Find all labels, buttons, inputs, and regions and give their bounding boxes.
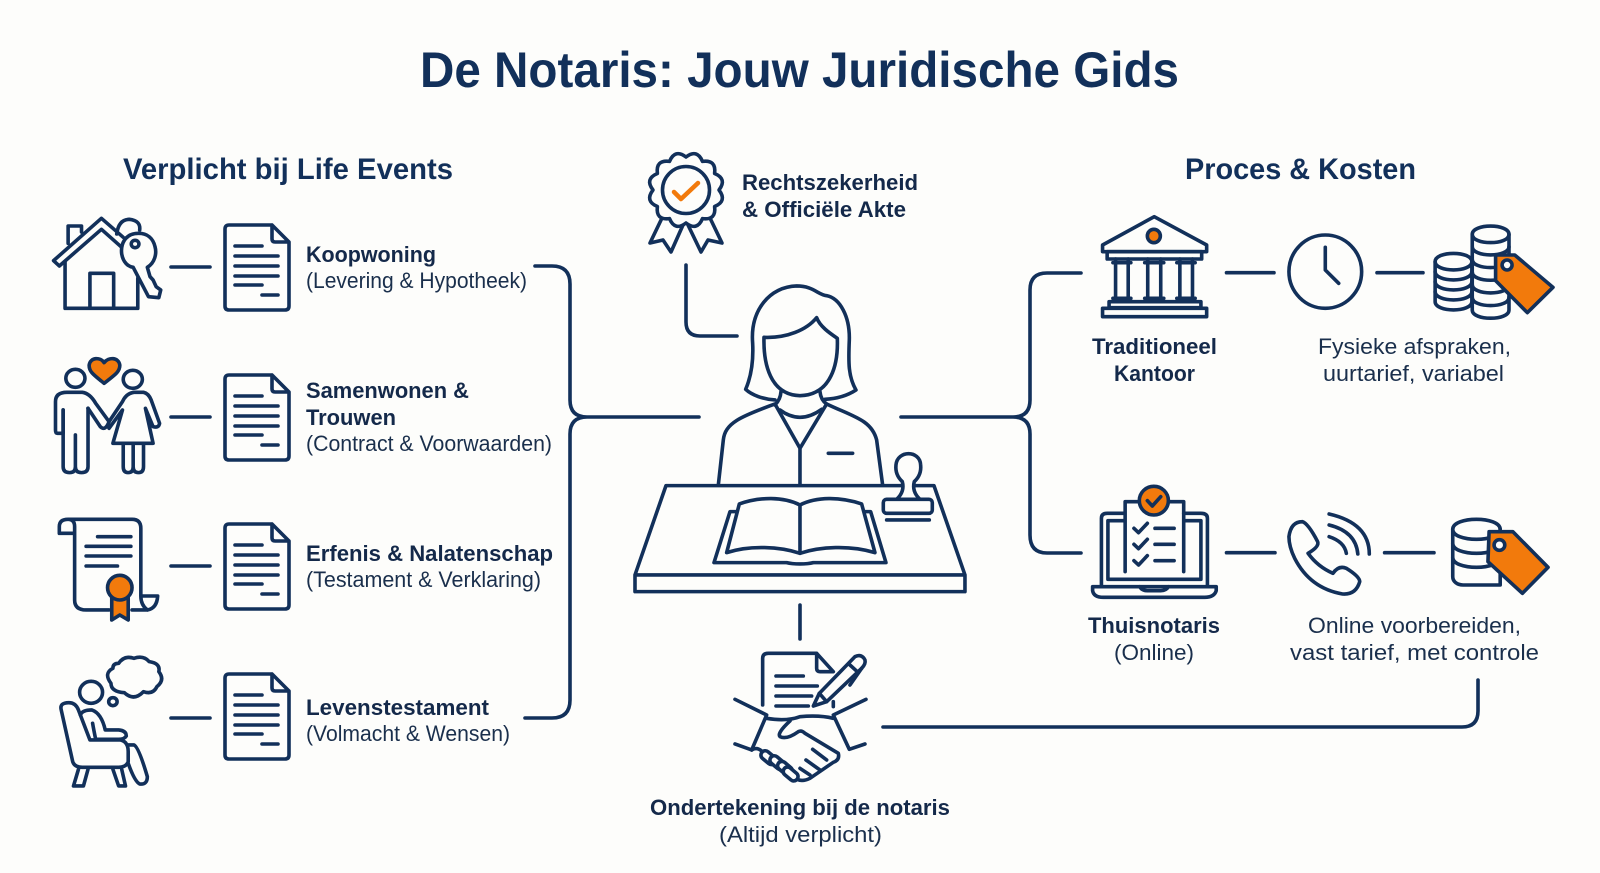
text: koopwoning: (Levering & Hypotheek) bbox=[306, 268, 527, 293]
icon: document bbox=[225, 674, 289, 759]
text: levenstestament: Levenstestament bbox=[306, 695, 490, 720]
icon: document bbox=[225, 225, 289, 310]
text: thuisnotaris bbox=[1088, 613, 1220, 665]
title: De Notaris: Jouw Juridische Gids bbox=[420, 42, 1179, 98]
connector dash bbox=[171, 415, 210, 419]
text: levenstestament: (Volmacht & Wensen) bbox=[306, 721, 510, 746]
text: samenwonen bbox=[306, 378, 552, 456]
connector dash bbox=[171, 265, 210, 269]
icon: laptop with checklist bbox=[1093, 486, 1216, 597]
arrow: left bracket to notary bbox=[525, 266, 699, 718]
connector dash bbox=[171, 564, 210, 568]
stamp bbox=[883, 454, 932, 520]
text: thuisnotaris: Thuisnotaris bbox=[1088, 613, 1220, 638]
text: erfenis bbox=[306, 541, 553, 592]
text: fysieke afspraken bbox=[1318, 334, 1511, 386]
text: levenstestament bbox=[306, 695, 510, 746]
text: rechtszekerheid bbox=[742, 170, 918, 222]
text: koopwoning: Koopwoning bbox=[306, 242, 436, 267]
text: samenwonen: Samenwonen & bbox=[306, 378, 469, 403]
text: fysieke afspraken: uurtarief, variabel bbox=[1323, 361, 1504, 386]
text: ondertekening: Ondertekening bij de notaris bbox=[650, 795, 950, 820]
heading: proces en kosten: Proces & Kosten bbox=[1185, 153, 1416, 186]
text: traditioneel kantoor bbox=[1092, 334, 1217, 386]
icon: scroll with seal bbox=[59, 519, 158, 620]
icon: document bbox=[225, 524, 289, 609]
text: samenwonen: (Contract & Voorwaarden) bbox=[306, 431, 552, 456]
text: koopwoning bbox=[306, 242, 527, 293]
heading: verplicht bij life events: Verplicht bij Life Events bbox=[123, 153, 453, 186]
text: erfenis: Erfenis & Nalatenschap bbox=[306, 541, 553, 566]
text: fysieke afspraken: Fysieke afspraken, bbox=[1318, 334, 1511, 359]
text: online voorbereiden: vast tarief, met controle bbox=[1290, 640, 1539, 665]
notary figure bbox=[718, 286, 883, 485]
text: thuisnotaris: (Online) bbox=[1114, 640, 1194, 665]
icon: coins with price tag bbox=[1453, 519, 1548, 593]
connector dash bbox=[1385, 551, 1434, 555]
connector dash bbox=[1226, 271, 1274, 275]
icon: document bbox=[225, 375, 289, 460]
connector dash bbox=[1226, 551, 1275, 555]
text: samenwonen: Trouwen bbox=[306, 405, 396, 430]
panel: thuisnotaris row bbox=[1088, 486, 1548, 665]
panel: koopwoning row bbox=[54, 218, 527, 310]
connector dash bbox=[1377, 271, 1423, 275]
icon: coins with price tag bbox=[1435, 226, 1553, 318]
arrow: desk to signing bbox=[798, 605, 802, 639]
text: traditioneel kantoor: Traditioneel bbox=[1092, 334, 1217, 359]
icon: certificate rosette bbox=[650, 154, 722, 252]
icon: couple with heart bbox=[55, 359, 160, 473]
arrow: right bracket from notary bbox=[901, 273, 1081, 553]
panel: traditioneel kantoor row bbox=[1092, 217, 1553, 386]
panel: erfenis row bbox=[59, 519, 553, 620]
text: erfenis: (Testament & Verklaring) bbox=[306, 567, 541, 592]
arrow: online process to signing bbox=[883, 680, 1478, 727]
open book bbox=[714, 499, 886, 564]
connector dash bbox=[171, 716, 210, 720]
text: rechtszekerheid: Rechtszekerheid bbox=[742, 170, 918, 195]
text: ondertekening: (Altijd verplicht) bbox=[719, 822, 882, 847]
icon: person in chair thinking bbox=[61, 657, 162, 786]
panel: samenwonen en trouwen row bbox=[55, 359, 552, 473]
text: traditioneel kantoor: Kantoor bbox=[1114, 361, 1195, 386]
text: online voorbereiden bbox=[1290, 613, 1539, 665]
panel: levenstestament row bbox=[61, 657, 510, 786]
icon: handshake with signed document bbox=[735, 653, 866, 783]
desk bbox=[635, 486, 965, 592]
icon: temple office bbox=[1103, 217, 1207, 317]
text: ondertekening bbox=[650, 795, 950, 847]
illustration: notary at desk bbox=[635, 286, 965, 592]
icon: clock bbox=[1289, 235, 1362, 308]
arrow: rosette to notary bbox=[686, 265, 737, 336]
text: online voorbereiden: Online voorbereiden, bbox=[1308, 613, 1521, 638]
text: rechtszekerheid: & Officiële Akte bbox=[742, 197, 906, 222]
icon: phone bbox=[1289, 514, 1369, 594]
icon: house with key bbox=[54, 218, 161, 308]
